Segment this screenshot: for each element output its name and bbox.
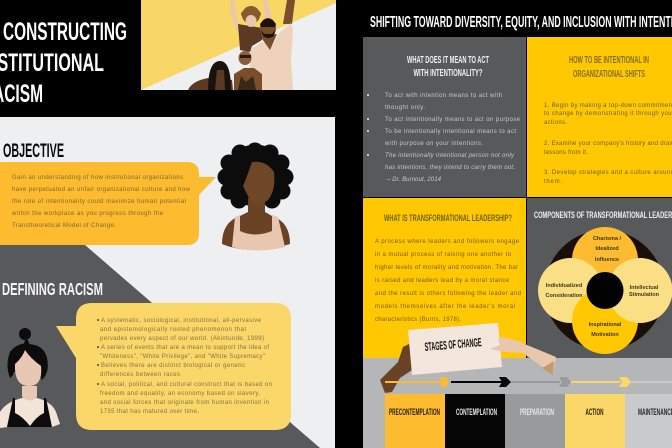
- panel: how to be intentional: 3. Develop strategies and a culture around: [544, 170, 672, 176]
- callout: objective: Transtheoretical Model of Change.: [12, 223, 116, 229]
- venn diagram: Idealized: [595, 246, 619, 252]
- icon: woman with hair bun: [0, 328, 60, 428]
- card: stages of change: STAGES OF CHANGE: [424, 335, 482, 354]
- venn diagram: Charisma /: [593, 236, 622, 242]
- panel: how to be intentional: 1. Begin by making a top-down commitment: [544, 103, 672, 109]
- venn diagram: Stimulation: [629, 292, 660, 298]
- panel: stages of change: [363, 358, 672, 448]
- panel: what is transformational leadership: WHAT IS TRANSFORMATIONAL LEADERSHIP?: [384, 213, 512, 223]
- panel: what is transformational leadership: A process where leaders and followers engage: [375, 239, 520, 245]
- panel: components of transformational leadership: [527, 198, 672, 358]
- stage boxes: PRECONTEMPLATION: [389, 407, 440, 418]
- title: CONSTRUCTING: [3, 18, 127, 46]
- stage boxes: [385, 394, 672, 448]
- panel: what is transformational leadership: characteristics (Burns, 1978).: [375, 317, 461, 323]
- callout: defining racism: pervades every aspect of our world. (Akintunde, 1999): [100, 336, 264, 342]
- venn diagram: Inspirational: [589, 322, 622, 328]
- title: [0, 18, 127, 108]
- card: stages of change: [408, 323, 502, 375]
- callout: defining racism: freedom and equality, an economy based on slavery,: [100, 391, 260, 397]
- panel: how to be intentional: lessons from it.: [544, 150, 588, 156]
- callout: defining racism: Believes there are distinct biological or genetic: [101, 363, 245, 369]
- callout: defining racism: 1735 that has matured over time.: [100, 409, 199, 415]
- icon: woman with afro: [218, 142, 294, 250]
- icon: light hand holding card: [490, 337, 556, 375]
- panel: how to be intentional: actions.: [544, 120, 567, 126]
- venn diagram: Influence: [595, 257, 619, 263]
- panel: how to be intentional: 2. Examine your company's history and draw: [544, 141, 672, 147]
- panel: what does it mean to act: WHAT DOES IT MEAN TO ACT: [407, 54, 489, 66]
- panel: how to be intentional: to change by demonstrating it through your: [544, 111, 672, 117]
- callout: defining racism: A systematic, sociological, institutional, all-pervasive: [101, 318, 262, 324]
- panel: what does it mean to act: WITH INTENTIONALITY?: [414, 67, 482, 79]
- stage boxes: ACTION: [586, 407, 604, 418]
- callout: objective: [0, 162, 216, 245]
- panel: what does it mean to act: – Dr. Burnout, 2014: [386, 177, 442, 183]
- panel: what is transformational leadership: [363, 198, 526, 358]
- callout: defining racism: and social forces that originate from human invention in: [100, 400, 269, 406]
- callout: objective: Gain an understanding of how institutional organizations: [12, 175, 183, 181]
- venn diagram: Individualized: [546, 283, 582, 289]
- panel: what does it mean to act: has intentions, they intend to carry them out.: [385, 165, 515, 171]
- callout: defining racism: "Whiteness", "White Privilege", and "White Supremacy": [100, 354, 265, 360]
- arrows: [451, 377, 672, 387]
- panel: what does it mean to act: To act with intention means to act with: [385, 93, 502, 99]
- venn diagram: Motivation: [591, 332, 619, 338]
- venn diagram: Intellectual: [630, 285, 659, 291]
- panel: what is transformational leadership: in a mutual process of raising one another to: [375, 252, 512, 258]
- callout: defining racism: and epistemologically rooted phenomenon that: [100, 327, 246, 333]
- panel: what does it mean to act: To be intentionally intentional means to act: [385, 129, 516, 135]
- venn diagram: [538, 227, 672, 354]
- heading: defining racism: DEFINING RACISM: [2, 279, 103, 299]
- callout: defining racism: A series of events that are a mean to support the idea of: [101, 345, 269, 351]
- panel: left page background: [0, 117, 335, 448]
- callout: objective: within the workplace as you progress through the: [11, 211, 164, 217]
- panel: what is transformational leadership: is raised and leaders lead by a moral stance: [375, 278, 510, 284]
- callout: defining racism: [56, 303, 291, 430]
- callout: defining racism: differences between races: [100, 372, 180, 378]
- stage boxes: CONTEMPLATION: [456, 407, 497, 418]
- venn diagram: Consideration: [546, 293, 583, 299]
- panel: how to be intentional: [527, 37, 672, 197]
- panel: what does it mean to act: To act intentionally means to act on purpose: [385, 117, 521, 123]
- panel: how to be intentional: them.: [544, 179, 562, 185]
- callout: objective: the role of intentionality could maximize human potential: [12, 199, 186, 205]
- panel: what is transformational leadership: and the result is others following the leader and: [375, 291, 521, 297]
- panel: what does it mean to act: thought only.: [385, 105, 425, 111]
- icon: dark hand holding card: [380, 344, 448, 393]
- panel: what does it mean to act: with purpose on your intentions.: [384, 141, 483, 147]
- callout: objective: have perpetuated an unfair organizational culture and how: [12, 187, 191, 193]
- stage boxes: PREPARATION: [520, 407, 554, 418]
- panel: what is transformational leadership: models themselves after the leader's moral: [375, 304, 515, 310]
- panel: what does it mean to act: [363, 37, 526, 197]
- banner image: group of people: [141, 0, 336, 90]
- callout: defining racism: A social, political, and cultural construct that is based on: [101, 382, 272, 388]
- panel: what is transformational leadership: higher levels of morality and motivation. The bar: [375, 265, 518, 271]
- heading: objective: OBJECTIVE: [3, 140, 64, 162]
- panel: what does it mean to act: The intentionally intentional person not only: [385, 153, 515, 159]
